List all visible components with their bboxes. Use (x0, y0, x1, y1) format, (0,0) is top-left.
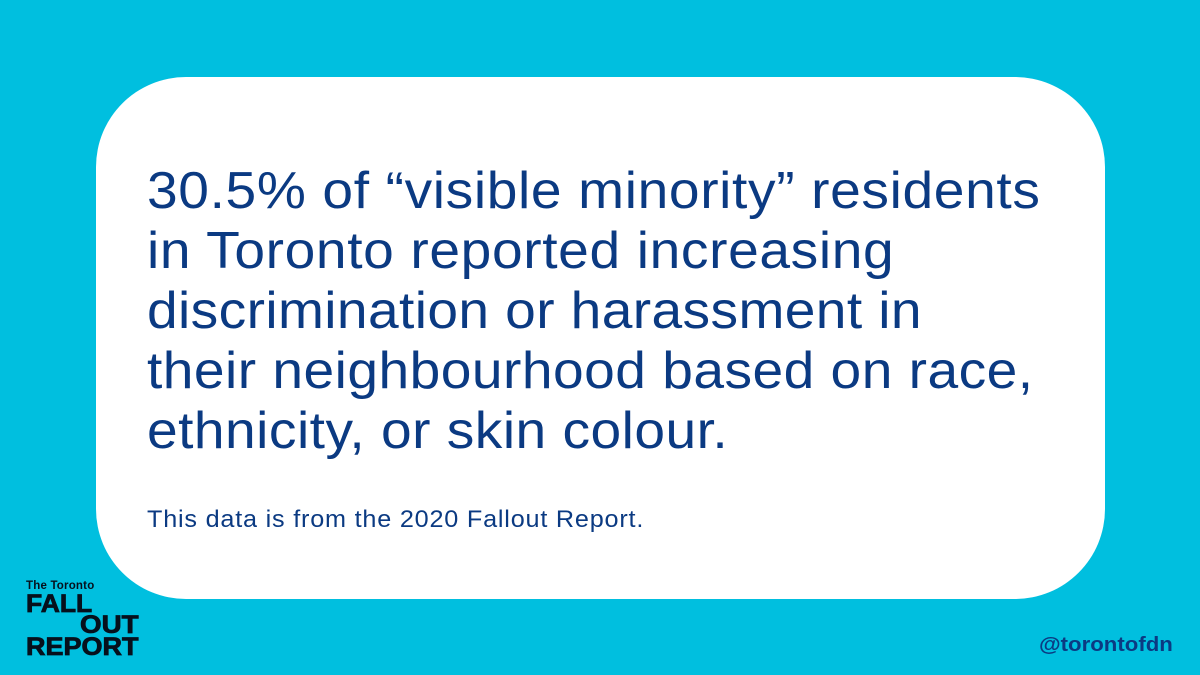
statistic text block: their neighbourhood based on race, (147, 342, 1034, 400)
statistic text block: discrimination or harassment in (147, 282, 922, 340)
statistic text block (147, 162, 1041, 460)
statistic text block: in Toronto reported increasing (147, 222, 894, 280)
social handle: @torontofdn (1039, 634, 1173, 656)
logo: The Toronto Fall Out Report: REPORT (26, 633, 139, 661)
source note: This data is from the 2020 Fallout Report. (147, 506, 644, 533)
logo: The Toronto Fall Out Report: OUT (80, 611, 139, 639)
statistic text block: 30.5% of “visible minority” residents (147, 162, 1041, 220)
logo: The Toronto Fall Out Report: The Toronto (26, 580, 94, 592)
logo: The Toronto Fall Out Report: FALL (26, 590, 92, 618)
statistic text block: ethnicity, or skin colour. (147, 402, 728, 460)
logo: The Toronto Fall Out Report (26, 580, 139, 661)
panel: white statistic card (96, 77, 1105, 599)
